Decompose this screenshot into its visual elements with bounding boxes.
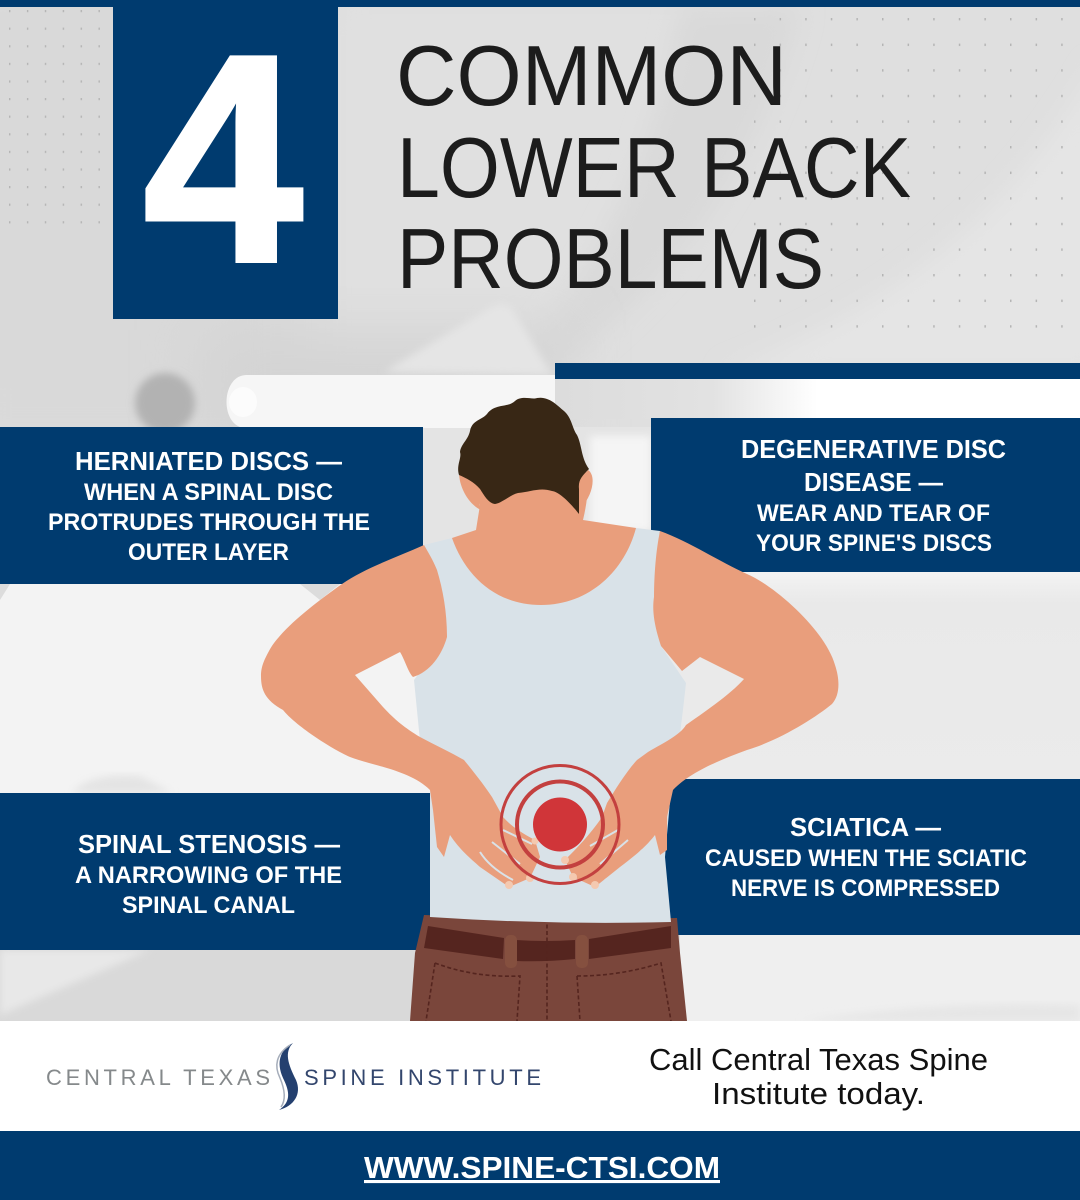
panel: spinal stenosis: SPINAL CANAL	[122, 892, 295, 919]
panel: degenerative disc disease: WEAR AND TEAR OF	[757, 500, 990, 527]
title: COMMON	[396, 29, 787, 124]
title	[396, 29, 911, 307]
accent bar	[555, 363, 1080, 379]
panel: sciatica: NERVE IS COMPRESSED	[731, 875, 1000, 902]
panel: degenerative disc disease: DEGENERATIVE DISC	[741, 434, 1006, 464]
panel: spinal stenosis	[0, 793, 430, 950]
panel: degenerative disc disease: DISEASE —	[804, 467, 943, 497]
pain target	[501, 766, 619, 884]
call to action	[649, 1042, 988, 1111]
call to action: Institute today.	[712, 1076, 925, 1111]
footer white band	[0, 1021, 1080, 1131]
logo	[46, 1043, 541, 1110]
title: LOWER BACK	[397, 121, 911, 216]
dot pattern: right	[750, 12, 1080, 332]
left arm and hand	[261, 545, 540, 887]
panel: herniated discs: WHEN A SPINAL DISC	[84, 479, 333, 506]
title: PROBLEMS	[397, 212, 824, 307]
ear: left	[459, 472, 481, 510]
pants	[410, 915, 687, 1021]
fingertips	[505, 838, 599, 889]
panel: spinal stenosis: SPINAL STENOSIS —	[78, 829, 340, 859]
finger gaps	[480, 830, 642, 880]
panel: degenerative disc disease	[651, 418, 1080, 572]
panel: herniated discs: PROTRUDES THROUGH THE	[48, 509, 370, 536]
hair	[458, 398, 589, 514]
website banner	[0, 1131, 1080, 1200]
logo: CENTRAL TEXAS	[46, 1065, 270, 1090]
right arm and hand	[565, 531, 838, 887]
website banner: WWW.SPINE-CTSI.COM	[364, 1150, 720, 1185]
dot pattern: left	[5, 8, 105, 228]
ear: right	[579, 470, 593, 510]
panel: spinal stenosis: A NARROWING OF THE	[75, 862, 342, 889]
tank top	[414, 528, 686, 923]
panel: sciatica: SCIATICA —	[790, 812, 941, 842]
logo: SPINE INSTITUTE	[304, 1065, 541, 1090]
illustration: man holding lower back	[261, 398, 838, 1021]
call to action: Call Central Texas Spine	[649, 1042, 988, 1077]
panel: sciatica	[660, 779, 1080, 935]
top border bar	[0, 0, 1080, 7]
panel: herniated discs: OUTER LAYER	[128, 539, 289, 566]
neck and head	[452, 440, 636, 605]
panel: herniated discs	[0, 427, 423, 584]
panel: sciatica: CAUSED WHEN THE SCIATIC	[705, 845, 1027, 872]
number badge: 4	[143, 0, 305, 324]
panel: degenerative disc disease: YOUR SPINE'S DISCS	[756, 530, 992, 557]
panel: herniated discs: HERNIATED DISCS —	[75, 446, 342, 476]
